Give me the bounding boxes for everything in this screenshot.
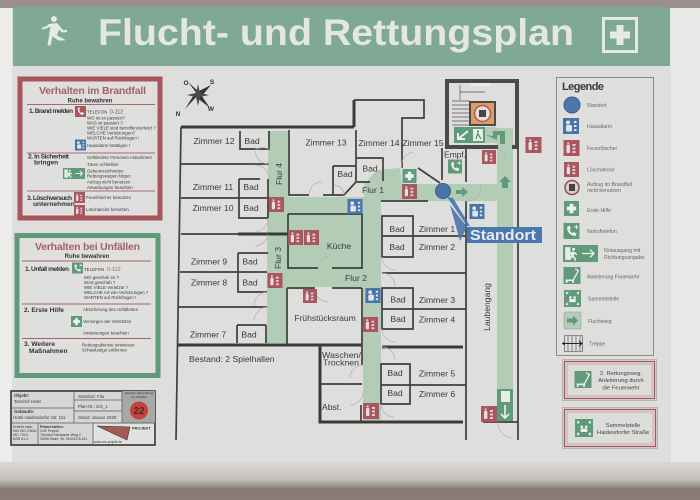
step 2: Versorgen der Verletzten: [83, 319, 132, 324]
step 2: [28, 154, 152, 190]
exit sign with down arrow: [497, 389, 513, 421]
panel heading: Verhalten im Brandfall: [39, 85, 146, 97]
icon: first aid cross: [604, 18, 636, 52]
step 2: Anweisungen beachten: [87, 185, 133, 190]
step 2: Türen schließen: [87, 162, 119, 167]
info box: plan details: CnE Projekt: [40, 429, 59, 433]
info box: plan details: Objekt:: [14, 393, 30, 398]
walls: central rooms: [287, 130, 440, 422]
step 1: WELCHE Verletzungen?: [87, 130, 136, 136]
step 1: 1. Brand melden: [29, 108, 73, 115]
item: Hausalarm: [563, 118, 612, 134]
item: Löschdecke: Löschdecke: [587, 168, 615, 174]
info box: plan details: DIN ISO 23601: [13, 429, 37, 433]
step 1: WIE VIELE Verletzte ?: [84, 285, 128, 290]
item: Treppe: [562, 336, 605, 352]
item: Notruftelefon: Notruftelefon: [587, 229, 617, 235]
item: Hausalarm: Hausalarm: [587, 124, 612, 130]
item: Fluchtweg: [564, 312, 612, 329]
arrow: left: [486, 131, 505, 144]
room labels: Waschen/: [322, 350, 362, 360]
info box: plan details: Hotel Haidesdorfer Str. 111: [13, 415, 66, 420]
logo: PROJEKT: [132, 426, 151, 430]
frame: bottom: [0, 462, 700, 500]
item: Erste Hilfe: Erste Hilfe: [587, 208, 611, 214]
step 2: Rettungswegen folgen: [87, 174, 131, 178]
icon: exit sign: [63, 168, 85, 179]
step 1: WARTEN auf Rückfragen !: [84, 295, 136, 300]
info box: plan details: ISO 7010: [13, 433, 28, 437]
room labels: Zimmer 6: [419, 389, 455, 399]
step 2: 2. Erste Hilfe: [24, 307, 64, 314]
item: Fluchtweg: Fluchtweg: [588, 319, 612, 325]
room labels: Bad: [362, 164, 378, 174]
item: Notausgang: Richtungsangabe: [604, 255, 644, 261]
info box: plan details: Planersteller:: [40, 425, 64, 429]
room labels: Flur 3: [273, 247, 283, 269]
info box: plan details: [11, 391, 155, 445]
icon: exit sign down-left: [454, 127, 485, 143]
item: Anleiterung Feuerwehr: [564, 267, 640, 284]
item: Anleiterung Feuerwehr: Anleiterung Feuerwehr: [587, 274, 640, 280]
room labels: Bad: [242, 256, 258, 266]
info box: plan details: Tannhof Hotel: [14, 399, 41, 404]
room labels: Bad: [387, 368, 403, 378]
step 1: WAS geschah ?: [84, 280, 116, 285]
logo: www.cne-projekt.de: [94, 440, 122, 444]
room labels: Bad: [244, 136, 260, 146]
info box: plan details: Plan-Nr.: DG_1: [78, 404, 108, 409]
info box: plan details: Standort: Flur: [78, 394, 105, 399]
info box: plan details: Nächste Überprüfung: [125, 391, 154, 395]
inspection seal: 22: [133, 406, 145, 417]
step 3: unternehmen: [33, 201, 75, 208]
callout: 2. Rettungsweg: [562, 360, 656, 400]
room labels: Bad: [387, 388, 403, 398]
item: Aufzug: nicht benutzen: [587, 188, 621, 194]
room labels: Zimmer 8: [191, 278, 227, 288]
step 2: Gekennzeichneten: [87, 168, 124, 174]
room labels: Küche: [327, 241, 351, 251]
room labels: Bad: [337, 169, 353, 179]
floor plan: [176, 79, 542, 440]
item: Standort: Standort: [587, 103, 607, 109]
step 2: Absicherung des Unfallortes: [83, 307, 139, 312]
step 1: WELCHE Art von Verletzungen ?: [84, 290, 149, 295]
step 1: TELEFON: [84, 267, 104, 272]
step 1: WIE VIELE sind betroffen/verletzt ?: [87, 126, 156, 130]
frame: top: [0, 0, 700, 8]
item: Treppe: Treppe: [589, 342, 605, 348]
info box: plan details: Stand: Januar 2020: [78, 415, 117, 420]
door arcs: [254, 147, 513, 438]
step 3: [27, 192, 131, 216]
callout: Sammelstelle: Sammelstelle: [606, 423, 640, 429]
room labels: Zimmer 12: [193, 136, 235, 146]
step 3: Schaulustige entfernen: [82, 348, 127, 352]
step 1: WO geschah es ?: [84, 275, 119, 280]
icon: phone: [75, 106, 86, 117]
step 1: WARTEN auf Rückfragen !: [87, 136, 139, 140]
step 2: Gefährdete Personen mitnehmen: [87, 155, 152, 160]
step 2: Anweisungen beachten: [83, 330, 129, 336]
callout: 2. Rettungsweg: Anleiterung durch: [598, 378, 644, 384]
room labels: Bad: [243, 203, 259, 213]
you-are-here marker: Standort: [470, 228, 536, 244]
subheading: Ruhe bewahren: [65, 254, 110, 260]
legend heading: Legende: [562, 81, 604, 93]
room labels: Zimmer 14: [358, 138, 400, 148]
step 1: 0-112: [107, 267, 121, 273]
item: Löschdecke: [564, 162, 615, 177]
subheading: Ruhe bewahren: [68, 98, 113, 104]
room labels: Bad: [390, 294, 406, 304]
room labels: Zimmer 7: [190, 330, 226, 340]
step 2: bringen: [34, 160, 58, 166]
room labels: Zimmer 15: [402, 138, 444, 148]
compass rose: [176, 79, 215, 118]
room labels: Zimmer 5: [419, 368, 455, 378]
panel: Verhalten im Brandfall: [20, 79, 160, 218]
item: Aufzug: Aufzug im Brandfall: [587, 182, 632, 188]
room labels: Bad: [390, 314, 406, 324]
callout: 2. Rettungsweg: 2. Rettungsweg:: [600, 371, 642, 377]
room labels: Zimmer 11: [193, 182, 233, 192]
corridors: [267, 128, 513, 421]
info box: plan details: bis 01/2022: [131, 395, 147, 399]
item: Notruftelefon: [564, 223, 617, 239]
step 1: [25, 262, 149, 300]
room labels: Bad: [243, 182, 259, 192]
step 1: WAS ist passiert ?: [87, 120, 123, 126]
step 3: 3. Weitere: [24, 341, 55, 348]
info box: plan details: Gebäude:: [14, 409, 35, 414]
arrow: north on gallery: [499, 176, 511, 188]
step 1: 1. Unfall melden: [25, 266, 69, 273]
step 3: Rettungsdienste einweisen: [82, 342, 135, 348]
step 1: TELEFON 0-112: [87, 110, 123, 116]
room labels: Empf.: [444, 150, 466, 160]
callout: Sammelstelle: Haidesdorfer Straße: [597, 430, 649, 436]
room labels: Bad: [241, 330, 257, 340]
walls: west rooms: [178, 131, 269, 343]
step 3: Feuerlöscher benutzen: [86, 195, 131, 200]
item: Feuerlöscher: Feuerlöscher: [587, 146, 618, 152]
room labels: Zimmer 2: [419, 242, 455, 252]
step 3: Maßnahmen: [29, 348, 67, 355]
room labels: Bestand: 2 Spielhallen: [189, 354, 275, 364]
stairwell: [447, 81, 517, 147]
heading: title: Flucht- und Rettungsplan: [98, 12, 574, 53]
step 2: [24, 307, 139, 336]
legend: [556, 78, 654, 356]
step 1: [29, 106, 156, 150]
compass rose: O: [183, 80, 189, 87]
item: Feuerlöscher: [564, 140, 618, 156]
info box: plan details: Theodor-Neubauer-Weg 2: [40, 433, 81, 437]
icon: elevator prohibition: [470, 102, 495, 125]
room labels: Bad: [242, 278, 258, 288]
room labels: Bad: [389, 224, 405, 234]
step 1: WO ist es passiert?: [87, 116, 126, 120]
item: Erste Hilfe: [564, 201, 611, 216]
item: Sammelstelle: Sammelstelle: [588, 296, 619, 302]
step 2: Aufzug nicht benutzen: [87, 180, 131, 184]
room labels: Zimmer 10: [192, 203, 234, 213]
room labels: Zimmer 13: [305, 138, 347, 148]
room labels: Zimmer 3: [419, 295, 455, 305]
icon: running person: [42, 16, 67, 46]
room labels: Bad: [389, 242, 405, 252]
room labels: Zimmer 9: [191, 256, 227, 266]
logo: [94, 426, 151, 444]
callout: Sammelstelle: [562, 408, 658, 448]
item: Standort: [564, 97, 607, 113]
item: Sammelstelle: [564, 290, 619, 307]
room labels: Flur 1: [362, 185, 384, 195]
walls: east rooms: [381, 216, 466, 404]
step 3: [24, 341, 135, 355]
item: Aufzug: [565, 180, 632, 194]
you-are-here marker: [436, 184, 542, 244]
frame: right: [671, 0, 700, 465]
room labels: Zimmer 1: [419, 224, 455, 234]
safety signs: [268, 137, 542, 422]
item: Notausgang: Notausgang mit: [604, 248, 641, 254]
frame: left: [0, 0, 12, 465]
room labels: Frühstücksraum: [294, 313, 356, 323]
step 1: Hausalarm betätigen !: [87, 143, 130, 148]
item: Notausgang: [563, 245, 644, 262]
callout: 2. Rettungsweg: die Feuerwehr: [602, 386, 640, 392]
walls: outer: [178, 100, 463, 422]
info box: plan details: Erstellt nach:: [13, 425, 33, 429]
room labels: Flur 4: [274, 163, 284, 185]
title banner: [13, 7, 670, 66]
compass rose: W: [208, 106, 215, 113]
step 3: Löschdecke benutzen: [86, 207, 129, 212]
room labels: Abst.: [322, 402, 342, 412]
room labels: Flur 2: [345, 273, 367, 283]
room labels: Laubengang: [482, 283, 492, 331]
room labels: Zimmer 4: [419, 314, 455, 324]
inspection seal: [130, 402, 148, 420]
info box: plan details: 01896 Glaire, Tel. 0810/1176-161: [40, 437, 87, 441]
panel heading: Verhalten bei Unfällen: [35, 241, 140, 253]
compass rose: N: [176, 111, 181, 118]
room labels: Trocknen: [323, 358, 359, 368]
arrow: east along corridor: [456, 187, 468, 197]
panel: Verhalten bei Unfällen: [17, 236, 158, 376]
step 3: 3. Löschversuch: [27, 195, 72, 202]
step 2: 2. In Sicherheit: [28, 154, 70, 160]
info box: plan details: ASR A1.3: [13, 437, 28, 441]
compass rose: S: [210, 79, 215, 86]
room labels: [189, 136, 492, 412]
